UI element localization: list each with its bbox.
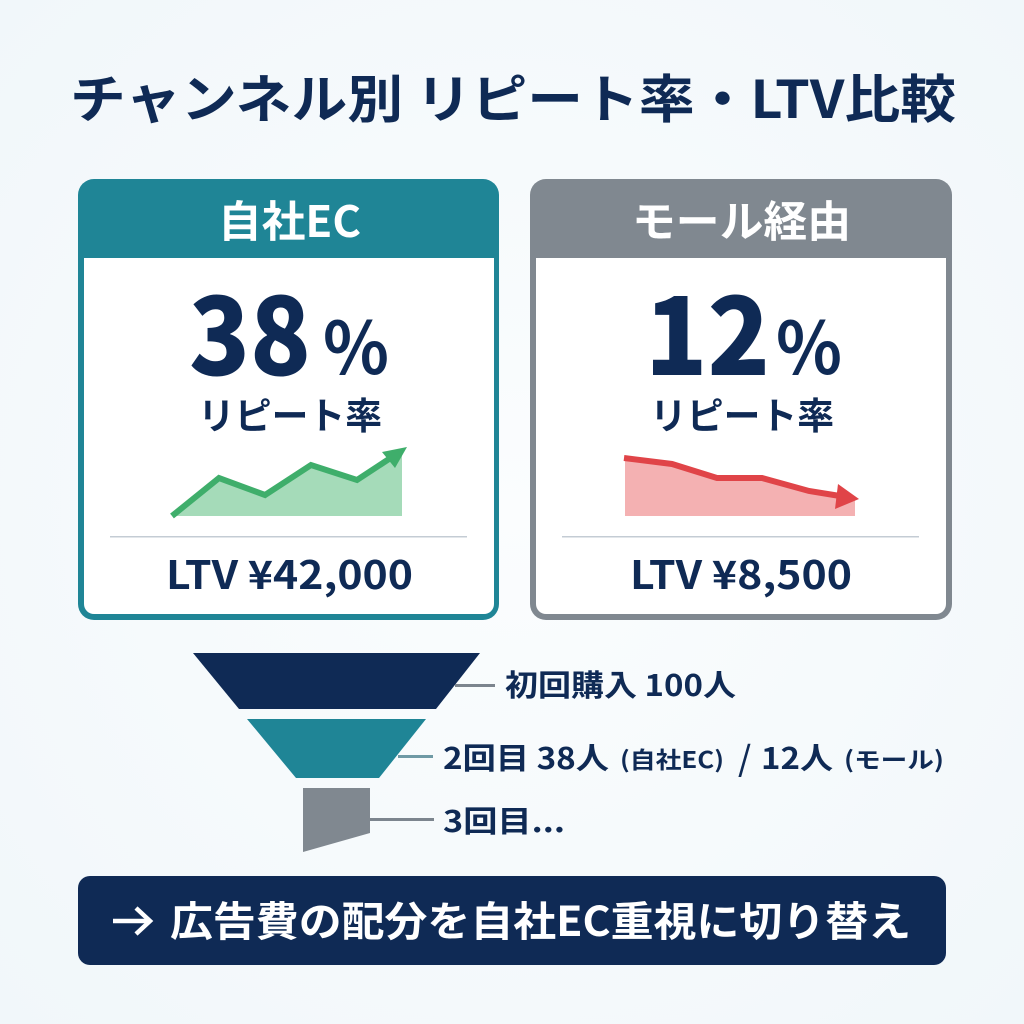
funnel step: third purchase: 3回目... xyxy=(443,797,565,841)
callout text: 広告費の配分を自社EC重視に切り替え xyxy=(170,888,911,948)
panel frame xyxy=(78,179,499,620)
percent sign: % xyxy=(323,290,389,395)
panel: モール経由 xyxy=(530,179,952,620)
funnel step: second purchase: 12人 xyxy=(761,734,833,778)
repeat rate value: 12 xyxy=(645,252,770,406)
chart: falling trend xyxy=(624,458,859,516)
repeat rate label: リピート率 xyxy=(198,386,382,440)
funnel step: first purchase xyxy=(193,653,736,709)
callout xyxy=(78,876,946,965)
panel: 自社EC xyxy=(78,179,499,620)
funnel step: third purchase xyxy=(303,788,565,852)
funnel step: first purchase: 初回購入 100人 xyxy=(505,661,736,705)
LTV value: LTV ¥8,500 xyxy=(630,545,852,601)
panel frame xyxy=(530,179,952,620)
panel heading: 自社EC xyxy=(218,188,361,250)
funnel step: second purchase: (モール) xyxy=(844,741,944,775)
chart: rising trend xyxy=(172,447,407,516)
panel heading: モール経由 xyxy=(632,188,851,250)
repeat rate value: 38 xyxy=(189,252,311,406)
percent sign: % xyxy=(776,290,842,395)
LTV value: LTV ¥42,000 xyxy=(166,545,413,601)
funnel step: second purchase: (自社EC) xyxy=(620,741,724,775)
funnel step: second purchase: / xyxy=(738,732,751,781)
funnel xyxy=(193,653,944,852)
title: チャンネル別 リピート率・LTV比較 xyxy=(70,58,956,133)
icon: arrow xyxy=(113,908,150,934)
funnel step: second purchase: 2回目 38人 xyxy=(443,734,609,778)
repeat rate label: リピート率 xyxy=(650,386,834,440)
funnel step: second purchase xyxy=(247,719,944,781)
